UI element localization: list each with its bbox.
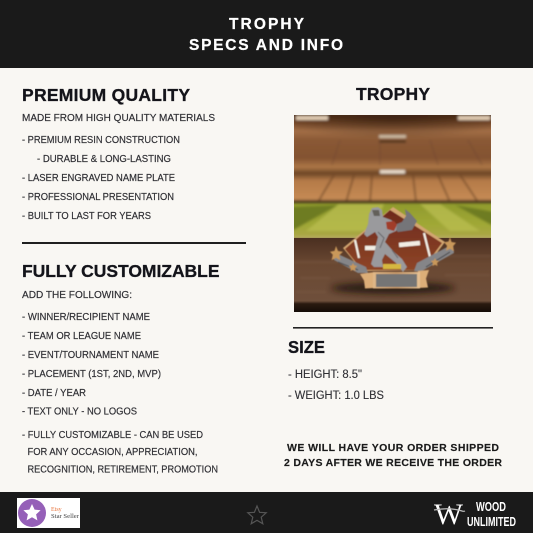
- badge: etsy star seller: Etsy: [51, 507, 62, 513]
- icon: purple badge: [18, 499, 46, 527]
- table: [294, 238, 491, 312]
- panel: premium quality: [22, 85, 215, 222]
- panel: size: [288, 337, 384, 402]
- icon: star: [248, 506, 266, 524]
- premium quality list: - PROFESSIONAL PRESENTATION: [22, 192, 174, 203]
- header banner: [0, 0, 533, 68]
- size values: - HEIGHT: 8.5": [288, 369, 362, 381]
- heading: size: SIZE: [288, 337, 325, 357]
- header title: SPECS AND INFO: [189, 37, 343, 54]
- premium quality list: - DURABLE & LONG-LASTING: [37, 154, 171, 165]
- stripes and laces: [355, 233, 430, 258]
- logo: wood unlimited: W: [434, 498, 464, 531]
- premium quality list: - BUILT TO LAST FOR YEARS: [22, 211, 151, 222]
- stars: [330, 246, 343, 260]
- customization list: - PLACEMENT (1ST, 2ND, MVP): [22, 369, 161, 380]
- customization list: - TEXT ONLY - NO LOGOS: [22, 406, 137, 418]
- premium quality list: - LASER ENGRAVED NAME PLATE: [22, 173, 175, 184]
- customization list: [22, 290, 218, 476]
- trophy frame: [343, 207, 445, 271]
- trophy: [330, 207, 456, 288]
- football: [345, 210, 442, 270]
- shipping note: WE WILL HAVE YOUR ORDER SHIPPED: [287, 442, 499, 454]
- product photo: [290, 113, 495, 312]
- customization list: - DATE / YEAR: [22, 388, 86, 399]
- badge: etsy star seller: [17, 498, 80, 528]
- shipping note: 2 DAYS AFTER WE RECEIVE THE ORDER: [284, 457, 502, 469]
- size values: - WEIGHT: 1.0 LBS: [288, 390, 384, 402]
- heading: premium quality: PREMIUM QUALITY: [22, 85, 190, 105]
- header title: TROPHY: [229, 16, 305, 33]
- field: [290, 203, 495, 239]
- shipping note: [284, 442, 502, 469]
- customization list: FOR ANY OCCASION, APPRECIATION,: [28, 447, 198, 458]
- cape: [396, 209, 418, 232]
- customization list: - TEAM OR LEAGUE NAME: [22, 331, 141, 342]
- premium quality list: [22, 113, 215, 222]
- header title: [189, 16, 343, 54]
- heading: trophy: TROPHY: [356, 84, 430, 104]
- customization list: ADD THE FOLLOWING:: [22, 290, 132, 301]
- size values: [288, 369, 384, 402]
- logo: wood unlimited: [434, 498, 516, 531]
- premium quality list: - PREMIUM RESIN CONSTRUCTION: [22, 135, 180, 146]
- footer bar: [0, 492, 533, 533]
- panel: fully customizable: [22, 261, 220, 476]
- customization list: - EVENT/TOURNAMENT NAME: [22, 350, 159, 361]
- badge: etsy star seller: Star Seller: [51, 514, 79, 520]
- customization list: - WINNER/RECIPIENT NAME: [22, 312, 150, 323]
- customization list: - FULLY CUSTOMIZABLE - CAN BE USED: [22, 430, 203, 441]
- customization list: RECOGNITION, RETIREMENT, PROMOTION: [28, 464, 218, 476]
- player: [364, 207, 407, 272]
- premium quality list: MADE FROM HIGH QUALITY MATERIALS: [22, 113, 215, 124]
- logo: wood unlimited: WOOD: [476, 499, 506, 514]
- silver rays: [333, 244, 454, 273]
- stadium background: [290, 113, 495, 203]
- heading: fully customizable: FULLY CUSTOMIZABLE: [22, 261, 220, 281]
- name plate ribbons: [360, 272, 375, 288]
